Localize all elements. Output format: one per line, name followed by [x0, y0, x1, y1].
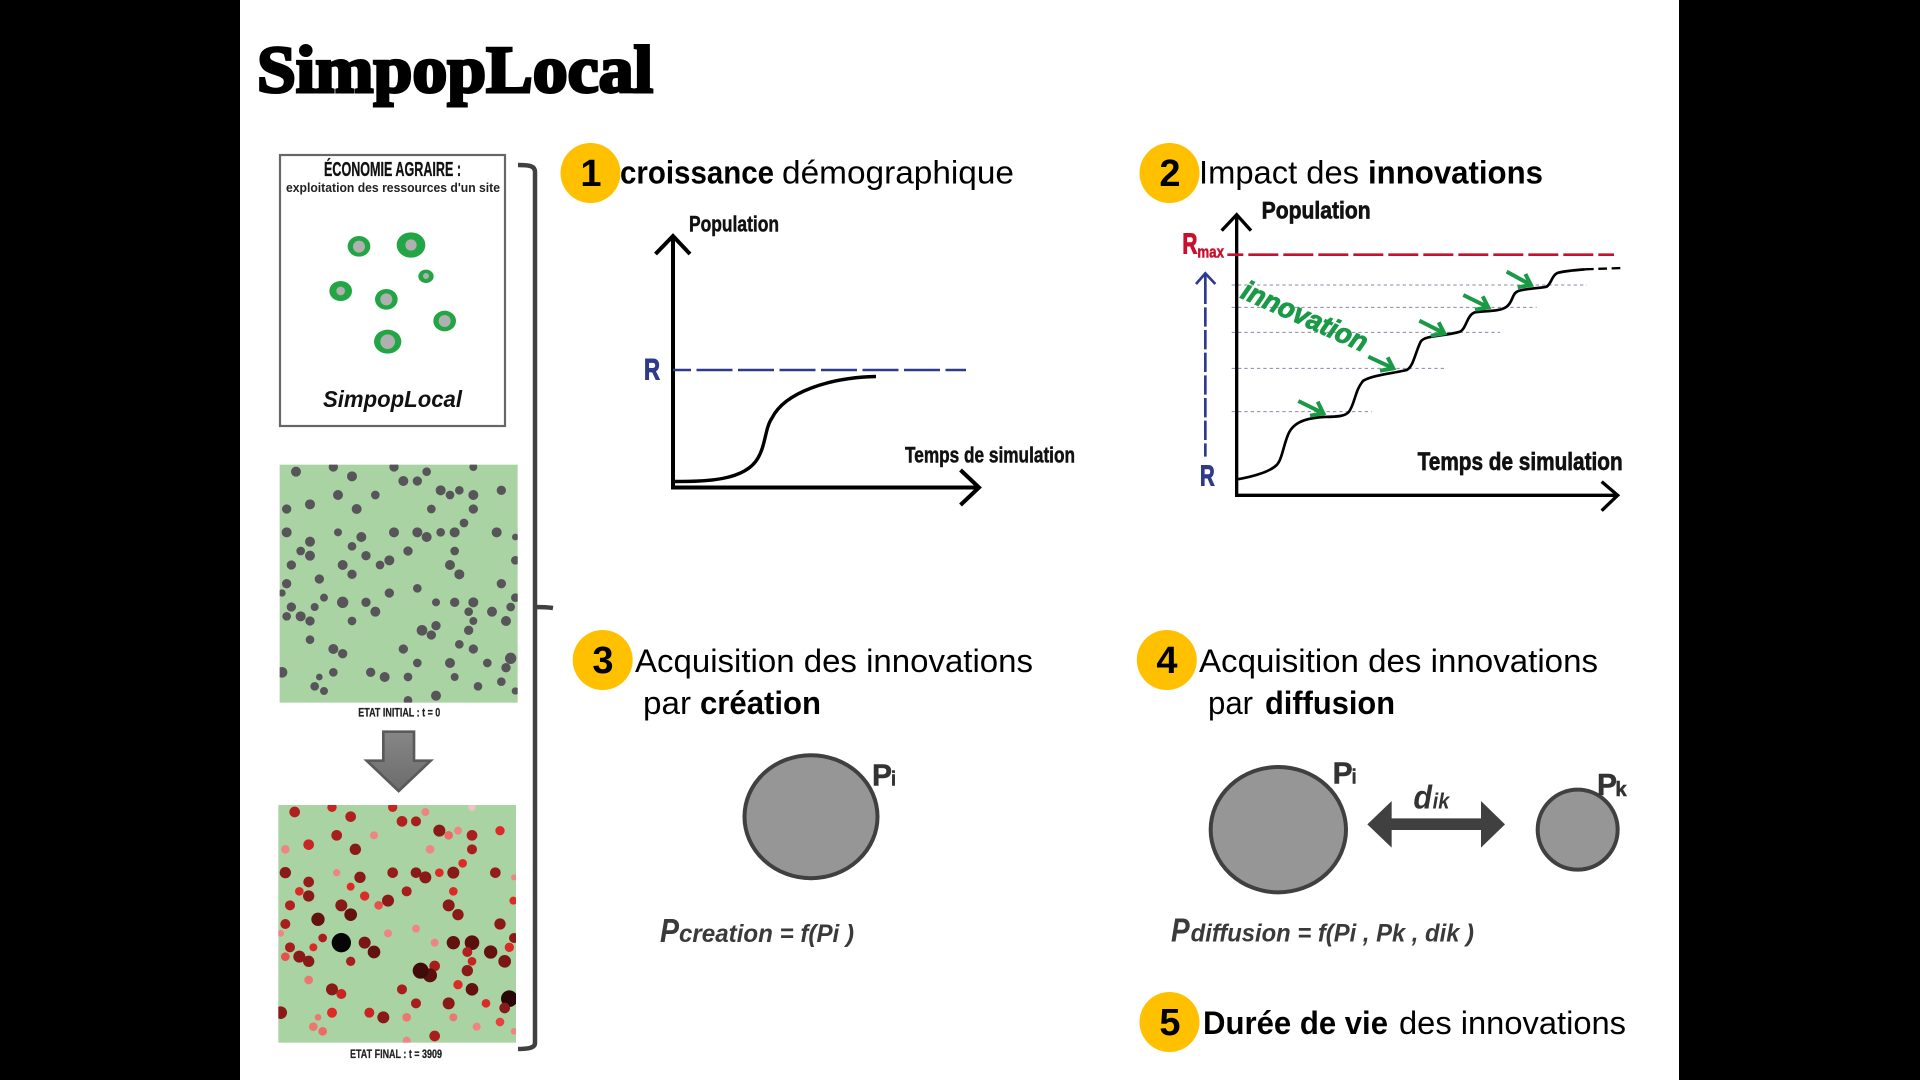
heading 4: 4	[1156, 640, 1178, 682]
label Pi: i	[891, 769, 896, 791]
innovation label: innovation	[1237, 274, 1373, 358]
y-axis label: Population	[1262, 197, 1371, 224]
map: final state	[274, 803, 519, 1045]
heading 2: innovations	[1368, 154, 1543, 190]
heading 3: Acquisition des innovations	[635, 643, 1033, 679]
slide background	[240, 0, 1679, 1080]
heading 2: 2	[1159, 153, 1181, 195]
heading 1: démographique	[782, 154, 1014, 190]
axes	[656, 236, 979, 505]
panel: économie agraire box	[280, 155, 505, 426]
dotted level lines	[1232, 285, 1587, 412]
settlement Pi	[1211, 767, 1346, 892]
heading 3: par	[643, 685, 691, 721]
formula: diffusion = f(Pi , Pk , dik )	[1191, 920, 1474, 948]
gaps of the range arrow	[1200, 290, 1210, 457]
heading 3: 3	[592, 640, 614, 682]
map: initial state	[277, 463, 519, 704]
formula: P	[1171, 913, 1190, 950]
diagram: diffusion	[1171, 756, 1628, 950]
label dik	[1413, 779, 1451, 816]
box subheading: exploitation des ressources d'un site	[286, 181, 500, 195]
vertical range arrow	[1196, 273, 1215, 457]
heading 2: Impact des	[1199, 154, 1359, 190]
heading 1: croissance	[620, 154, 774, 190]
settlement Pi	[744, 755, 878, 878]
Rmax line	[1227, 251, 1614, 259]
caption: initial state: ETAT INITIAL : t = 0	[358, 706, 441, 720]
chart 2: stepped growth with innovations	[1182, 197, 1623, 511]
arrow: initial to final	[367, 732, 431, 791]
heading 5: 5	[1159, 1002, 1181, 1044]
heading 4: par	[1208, 685, 1253, 721]
bracket	[518, 165, 553, 1049]
label Pi: P	[1333, 756, 1353, 790]
label Pi: P	[872, 758, 892, 793]
formula: P	[660, 912, 680, 949]
R label: R	[1200, 460, 1215, 492]
label Pi: i	[1352, 766, 1357, 788]
axes	[1222, 215, 1618, 511]
label Pk	[1597, 768, 1628, 802]
heading 5	[1140, 992, 1626, 1052]
diagram: creation	[660, 755, 896, 949]
formula	[1171, 913, 1474, 950]
Rmax label: R	[1182, 228, 1198, 260]
growth curve	[675, 376, 876, 482]
innovation arrows	[1298, 272, 1531, 416]
heading 1	[560, 143, 1014, 203]
title: SimpopLocal	[257, 33, 653, 107]
innovation curve	[1237, 269, 1585, 479]
curve extension	[1585, 268, 1622, 269]
heading 3	[573, 630, 1033, 721]
heading 5: Durée de vie	[1203, 1005, 1388, 1041]
y-axis label: Population	[689, 212, 779, 236]
heading 3: création	[700, 685, 821, 721]
R label: R	[644, 354, 660, 386]
heading 1: 1	[580, 153, 602, 195]
heading 4	[1137, 630, 1598, 721]
settlements with resource rings	[329, 232, 456, 354]
heading 4: diffusion	[1265, 685, 1395, 721]
label dik: ik	[1433, 788, 1451, 813]
label Pk: P	[1597, 768, 1617, 802]
formula	[660, 912, 854, 949]
caption: final state: ETAT FINAL : t = 3909	[350, 1047, 442, 1061]
heading 5: des innovations	[1399, 1005, 1626, 1041]
x-axis label: Temps de simulation	[905, 442, 1075, 468]
Rmax label: max	[1197, 243, 1225, 262]
x-axis label: Temps de simulation	[1418, 449, 1623, 476]
heading 4: Acquisition des innovations	[1199, 643, 1598, 679]
box footer label: SimpopLocal	[323, 386, 463, 412]
label Pk: k	[1615, 779, 1628, 801]
label dik: d	[1413, 779, 1433, 816]
R limit	[673, 369, 966, 371]
settlement Pk	[1538, 790, 1618, 870]
box heading: ÉCONOMIE AGRAIRE :	[324, 158, 461, 181]
double arrow	[1367, 801, 1505, 848]
heading 2	[1140, 143, 1543, 203]
Rmax label	[1182, 228, 1225, 262]
chart 1: logistic growth	[644, 212, 1075, 505]
formula: creation = f(Pi )	[679, 920, 854, 948]
